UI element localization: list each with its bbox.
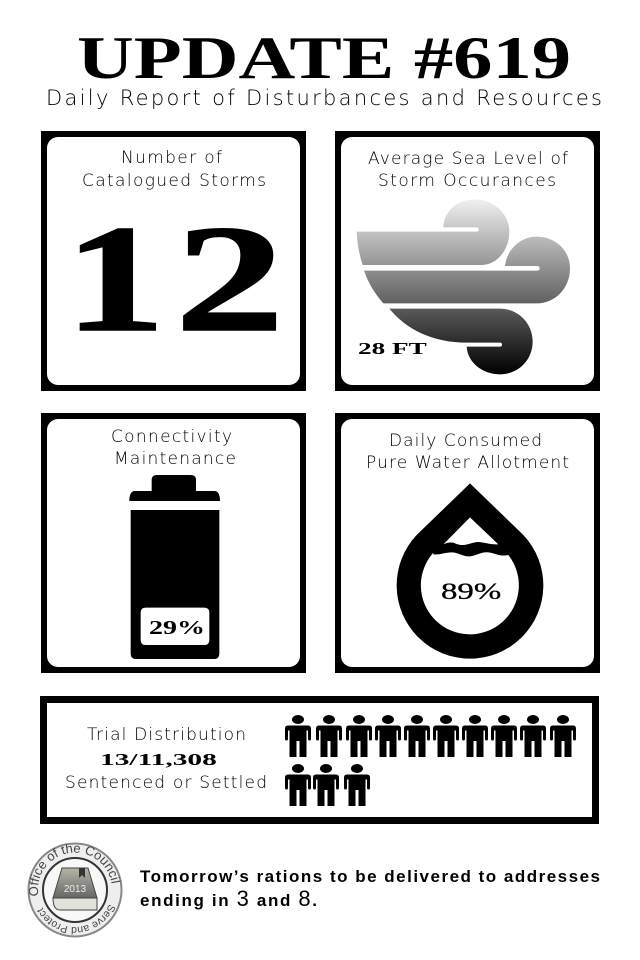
value: 29%: 29% [149, 617, 205, 639]
big number 12: 1 [64, 193, 165, 363]
trial distribution text: 13/11,308 [100, 751, 217, 769]
subtitle: Daily Report of Disturbances and Resources [46, 86, 602, 110]
panel: water [335, 413, 600, 673]
panel: sea level [335, 131, 600, 391]
panel: catalogued storms [41, 131, 306, 391]
panel heading: pure water allotment: Daily Consumed [389, 431, 542, 451]
icon: battery [129, 475, 220, 659]
panel heading: average sea level [368, 149, 568, 191]
seal: office of the council [28, 842, 122, 938]
seal: office of the council: 2013 [64, 884, 87, 895]
panel: trial distribution [40, 696, 599, 824]
pictogram: thirteen people [285, 715, 576, 806]
footer notice: Tomorrow’s rations to be delivered to addresses [140, 867, 600, 886]
title: UPDATE #619 [77, 26, 571, 92]
value: 89%: 89% [441, 580, 501, 605]
panel heading: average sea level: Average Sea Level of [368, 149, 568, 169]
value: 28 ft: 28 FT [358, 339, 427, 358]
panel heading: connectivity maintenance: Maintenance [114, 449, 236, 469]
big number 12: 2 [175, 194, 284, 363]
panel: connectivity [41, 413, 306, 673]
trial distribution text: Sentenced or Settled [65, 773, 267, 793]
icon: wind and storm [357, 199, 570, 374]
icon: water drop [397, 483, 543, 659]
trial distribution text: Trial Distribution [87, 725, 246, 745]
panel heading: connectivity maintenance: Connectivity [111, 427, 232, 447]
seal: office of the council: Serve and Protect [37, 904, 115, 935]
footer notice: ending in 3 and 8. [140, 886, 317, 911]
trial distribution text [65, 725, 267, 793]
footer notice [140, 867, 600, 911]
big number 12 [64, 193, 284, 363]
panel heading: connectivity maintenance [111, 427, 236, 469]
seal: office of the council: Office of the Council [29, 844, 121, 896]
panel heading: pure water allotment: Pure Water Allotment [366, 453, 569, 473]
panel heading: average sea level: Storm Occurances [378, 171, 556, 191]
panel heading: number of catalogued storms: Catalogued Storms [82, 171, 266, 191]
panel heading: number of catalogued storms: Number of [121, 148, 222, 168]
panel heading: pure water allotment [366, 431, 569, 473]
panel heading: number of catalogued storms [82, 148, 266, 191]
